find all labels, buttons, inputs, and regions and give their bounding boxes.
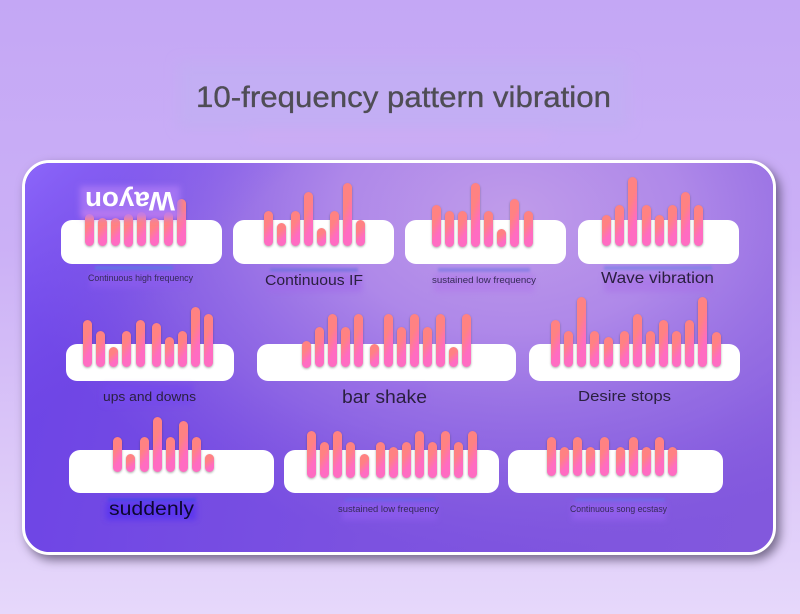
label smudge <box>434 268 534 292</box>
bars: sustained low frequency <box>432 183 533 247</box>
card: sustained low frequency <box>405 183 566 292</box>
label smudge <box>103 385 193 405</box>
label: suddenly: suddenly <box>109 499 195 520</box>
smudge behind Wayon <box>80 186 182 219</box>
label: bar shake: bar shake <box>342 387 427 407</box>
label: Continuous IF: Continuous IF <box>265 272 363 289</box>
label: ups and downs: ups and downs <box>103 389 197 404</box>
label smudge <box>90 266 190 288</box>
card: Wave vibration <box>578 177 739 292</box>
title smudge background <box>178 62 628 138</box>
card: suddenly <box>69 417 274 520</box>
bars: Continuous high frequency <box>85 199 186 247</box>
card: Continuous IF <box>233 183 394 292</box>
label: Continuous song ecstasy: Continuous song ecstasy <box>570 504 667 514</box>
bars: Continuous song ecstasy <box>547 437 677 476</box>
label: sustained low frequency 2: sustained low frequency <box>338 504 440 514</box>
panel: pattern cards <box>24 162 774 554</box>
bars: ups and downs <box>83 307 213 367</box>
bars: bar shake <box>302 314 471 368</box>
bars: Continuous IF <box>264 183 365 246</box>
label smudge <box>106 498 196 520</box>
card: Desire stops <box>529 297 740 405</box>
label: Wave vibration: Wave vibration <box>601 270 714 287</box>
card: sustained low frequency 2 <box>284 431 499 520</box>
bars: sustained low frequency 2 <box>307 431 477 478</box>
card: bar shake <box>257 314 516 407</box>
bars: Desire stops <box>551 297 721 367</box>
label smudge <box>604 266 712 292</box>
title: 10-frequency pattern vibration <box>196 81 611 114</box>
card: Continuous high frequency <box>61 186 222 288</box>
card: ups and downs <box>66 307 234 405</box>
label smudge <box>572 498 666 520</box>
label: sustained low frequency: sustained low frequency <box>432 275 537 285</box>
bars: suddenly <box>113 417 214 472</box>
label: Continuous high frequency: Continuous high frequency <box>88 273 193 283</box>
card: Continuous song ecstasy <box>508 437 723 520</box>
label smudge <box>345 386 427 406</box>
inverted label: Wayon: Wayon <box>85 186 175 216</box>
label: Desire stops: Desire stops <box>578 388 671 405</box>
label smudge <box>268 268 362 292</box>
label smudge <box>342 498 437 520</box>
bars: Wave vibration <box>602 177 703 246</box>
